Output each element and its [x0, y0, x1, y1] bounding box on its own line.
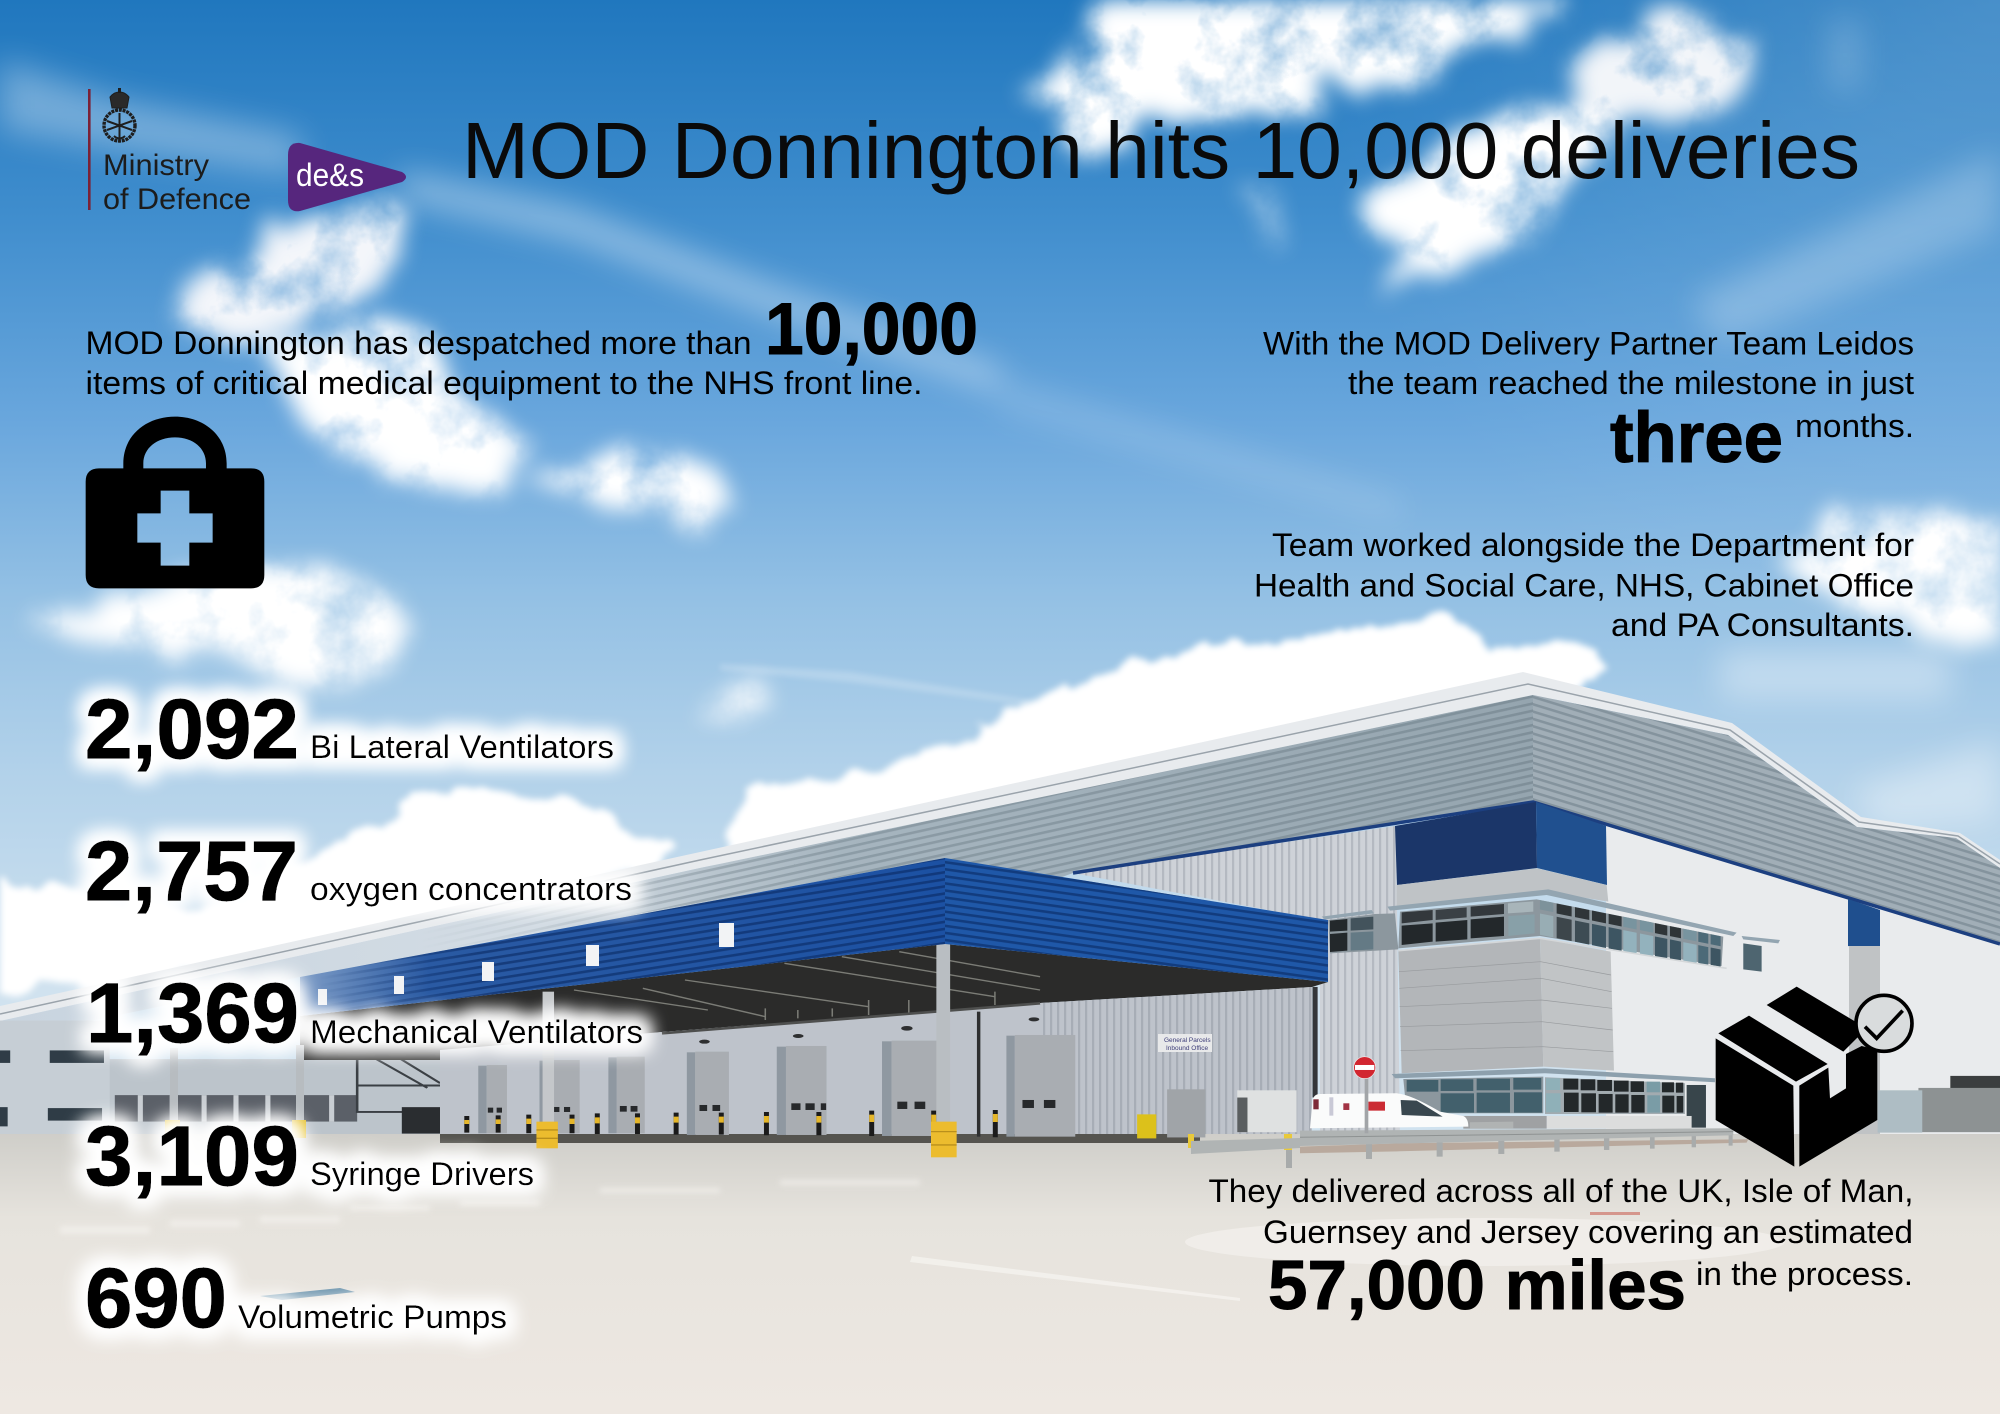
stat: bi lateral ventilators — [85, 682, 614, 776]
delivery van — [1310, 1093, 1468, 1128]
small columns and barriers left — [165, 1045, 306, 1138]
canopy underside — [300, 944, 1328, 1060]
loading bay back wall — [440, 987, 1312, 1136]
canopy columns — [536, 942, 957, 1157]
upper window frame — [1398, 899, 1723, 966]
rail end markers — [1188, 1134, 1300, 1168]
logo: de&s pennant: de&s — [296, 157, 364, 193]
lower windows — [1403, 1077, 1543, 1113]
text block: 57,000 miles: They delivered across all of the UK, Isle of Man, — [1208, 1173, 1914, 1209]
text block: three months: With the MOD Delivery Partner Team Leidos — [1263, 326, 1914, 362]
upper cladding, left elevation — [0, 695, 1533, 1040]
logo: de&s pennant — [288, 143, 406, 211]
warehouse building photo — [0, 672, 2000, 1414]
building sign: General Parcels Inbound Office: Inbound Office — [1166, 1045, 1209, 1052]
no entry sign — [1354, 1057, 1376, 1133]
cornice — [1387, 889, 1737, 936]
white wall — [1606, 826, 2000, 1140]
logo: Ministry of Defence — [88, 88, 251, 216]
text block: partners: and PA Consultants. — [1611, 607, 1914, 643]
logo: Ministry of Defence: of Defence — [103, 183, 251, 216]
concrete yard — [0, 1134, 2000, 1414]
icon: MOD crest — [104, 88, 135, 141]
stat: oxygen concentrators: 2,757 — [85, 824, 298, 918]
text block: 10,000 items despatched — [86, 289, 978, 401]
grey clad block — [1398, 938, 1543, 1073]
stat: mechanical ventilators: 1,369 — [86, 966, 299, 1060]
text block: partners — [1254, 527, 1914, 643]
light panel — [1397, 868, 1608, 908]
canopy fascia — [300, 858, 945, 1016]
stat: volumetric pumps: Volumetric Pumps — [238, 1299, 507, 1335]
left distant warehouse area — [0, 1021, 485, 1136]
title: MOD Donnington hits 10,000 deliveries — [462, 106, 1860, 195]
stat: oxygen concentrators — [85, 824, 632, 918]
tick circle — [1856, 995, 1912, 1051]
text block: three months — [1263, 326, 1914, 478]
stat: mechanical ventilators — [86, 966, 643, 1060]
corrugated wall — [1073, 826, 1400, 1140]
text block: 57,000 miles: 57,000 miles — [1268, 1246, 1686, 1324]
loading bays: doors, bollards and columns — [467, 942, 1075, 1157]
bay number plates — [318, 923, 734, 1005]
upper cladding, right elevation — [1533, 695, 2000, 944]
text block: 57,000 miles — [1208, 1173, 1914, 1324]
text block: three months: the team reached the milestone in just — [1348, 365, 1914, 401]
text block: 57,000 miles: Guernsey and Jersey covering an estimated — [1263, 1214, 1913, 1250]
text block: three months: months. — [1795, 408, 1914, 444]
stat: bi lateral ventilators: 2,092 — [85, 682, 299, 776]
stat: syringe drivers — [85, 1109, 534, 1203]
stat: bi lateral ventilators: Bi Lateral Ventilators — [310, 729, 614, 765]
text block: 57,000 miles: in the process. — [1696, 1256, 1913, 1292]
stat: mechanical ventilators: Mechanical Ventilators — [310, 1014, 643, 1050]
stat: volumetric pumps: 690 — [85, 1251, 227, 1345]
text block: three months: three — [1610, 399, 1783, 478]
building sign: General Parcels Inbound Office — [1158, 1034, 1212, 1052]
building sign: General Parcels Inbound Office: General Parcels — [1164, 1037, 1211, 1044]
navy and blue panels — [1395, 802, 1537, 885]
icon: medical bag — [86, 417, 264, 588]
text block: 10,000 items despatched: MOD Donnington has despatched more than — [86, 325, 752, 361]
guard rail — [1300, 1122, 1748, 1159]
text block: 10,000 items despatched: 10,000 — [765, 289, 978, 370]
ceiling trusses — [574, 952, 1040, 1020]
text block: partners: Health and Social Care, NHS, Cabinet Office — [1254, 568, 1914, 604]
office block — [1300, 868, 1780, 1159]
stat: oxygen concentrators: oxygen concentrators — [310, 871, 632, 907]
icon: parcel with tick — [1716, 987, 1912, 1167]
lower cornice — [1392, 1068, 1715, 1082]
equipment statistics list — [85, 682, 643, 1345]
stat: syringe drivers: 3,109 — [85, 1109, 299, 1203]
stat: volumetric pumps — [85, 1251, 507, 1345]
text block: 10,000 items despatched: items of critical medical equipment to the NHS front line. — [86, 365, 922, 401]
right yard items — [1137, 987, 2000, 1138]
roof fascia — [0, 672, 2000, 1021]
stat: syringe drivers: Syringe Drivers — [310, 1156, 534, 1192]
text block: partners: Team worked alongside the Department for — [1272, 527, 1914, 563]
logo: Ministry of Defence: Ministry — [103, 149, 209, 182]
